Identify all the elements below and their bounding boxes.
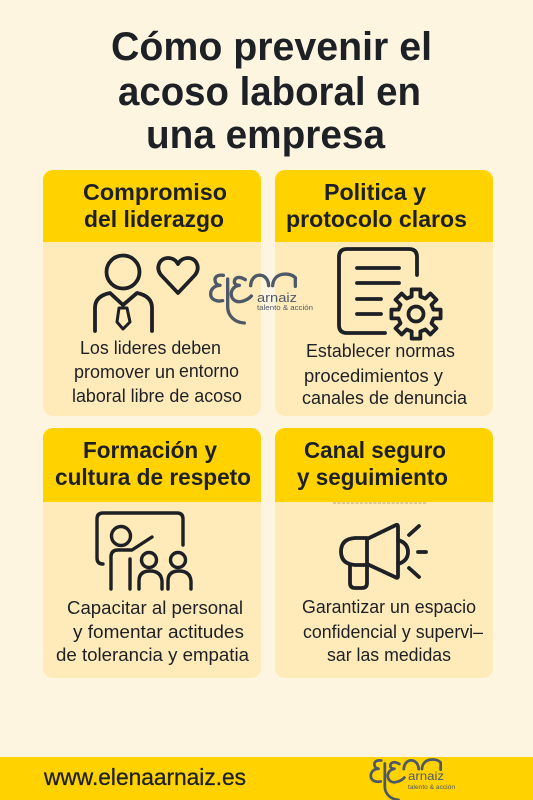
title xyxy=(111,25,432,157)
panel header: politica xyxy=(275,170,493,242)
text: compromiso description: Los lideres deben xyxy=(80,338,221,358)
text: compromiso description: promover un xyxy=(74,362,175,382)
icon: megaphone xyxy=(341,525,426,588)
text: compromiso description xyxy=(72,338,242,406)
footer bar xyxy=(0,757,533,800)
heading: canal seguro y seguimiento: y seguimiento xyxy=(297,464,448,490)
text: canal description xyxy=(302,597,483,665)
text: politica description: canales de denuncia xyxy=(302,388,468,408)
text: politica description xyxy=(302,341,468,408)
icon: heart xyxy=(158,258,198,293)
heading: compromiso del liderazgo xyxy=(83,179,227,232)
panel header: canal seguro xyxy=(275,428,493,502)
heading: formacion y cultura de respeto: cultura de respeto xyxy=(55,464,251,490)
logo: elena arnaiz watermark: talento & acción xyxy=(257,305,313,312)
panel: canal seguro y seguimiento xyxy=(275,428,493,678)
title: una empresa xyxy=(146,113,386,157)
heading: politica y protocolo claros: Politica y xyxy=(324,179,426,205)
text: formacion description xyxy=(56,598,250,665)
heading: compromiso del liderazgo: Compromiso xyxy=(83,179,227,205)
text: canal description: Garantizar un espacio xyxy=(302,597,476,617)
heading: canal seguro y seguimiento: Canal seguro xyxy=(304,437,446,463)
text: canal description: sar las medidas xyxy=(327,645,451,665)
icon: leader with tie xyxy=(95,256,152,331)
heading: politica y protocolo claros xyxy=(286,179,467,232)
heading: formacion y cultura de respeto xyxy=(55,437,251,490)
footer logo: arnaiz xyxy=(408,769,444,783)
icon: teacher and students at board xyxy=(97,513,191,589)
text: compromiso description: laboral libre de acoso xyxy=(72,386,242,406)
title: Cómo prevenir el xyxy=(111,25,432,69)
footer logo: talento & acción xyxy=(408,784,455,791)
icon: gear xyxy=(391,289,441,339)
icon: document with lines xyxy=(339,249,417,333)
footer url: www.elenaarnaiz.es xyxy=(43,764,246,790)
text: formacion description: y fomentar actitudes xyxy=(73,622,244,642)
text: canal description: confidencial y supervi– xyxy=(303,622,483,642)
panel: politica y protocolo xyxy=(275,170,493,416)
heading: compromiso del liderazgo: del liderazgo xyxy=(84,206,224,232)
text: politica description: Establecer normas xyxy=(306,341,455,361)
text: politica description: procedimientos y xyxy=(304,366,443,386)
text: formacion description: de tolerancia y empatia xyxy=(56,645,250,665)
footer logo xyxy=(371,759,455,800)
heading: canal seguro y seguimiento xyxy=(297,437,448,490)
text: formacion description: Capacitar al personal xyxy=(67,598,243,618)
heading: formacion y cultura de respeto: Formación y xyxy=(83,437,217,463)
panel header: formacion xyxy=(43,428,261,502)
logo: elena arnaiz watermark: arnaiz xyxy=(257,290,297,305)
title: acoso laboral en xyxy=(118,70,421,114)
panel: compromiso del liderazgo xyxy=(43,170,261,416)
text: compromiso description: entorno xyxy=(179,361,239,381)
panel header: compromiso xyxy=(43,170,261,242)
panel: formacion y cultura xyxy=(43,428,261,678)
logo: elena arnaiz watermark xyxy=(211,274,313,323)
heading: politica y protocolo claros: protocolo claros xyxy=(286,206,467,232)
